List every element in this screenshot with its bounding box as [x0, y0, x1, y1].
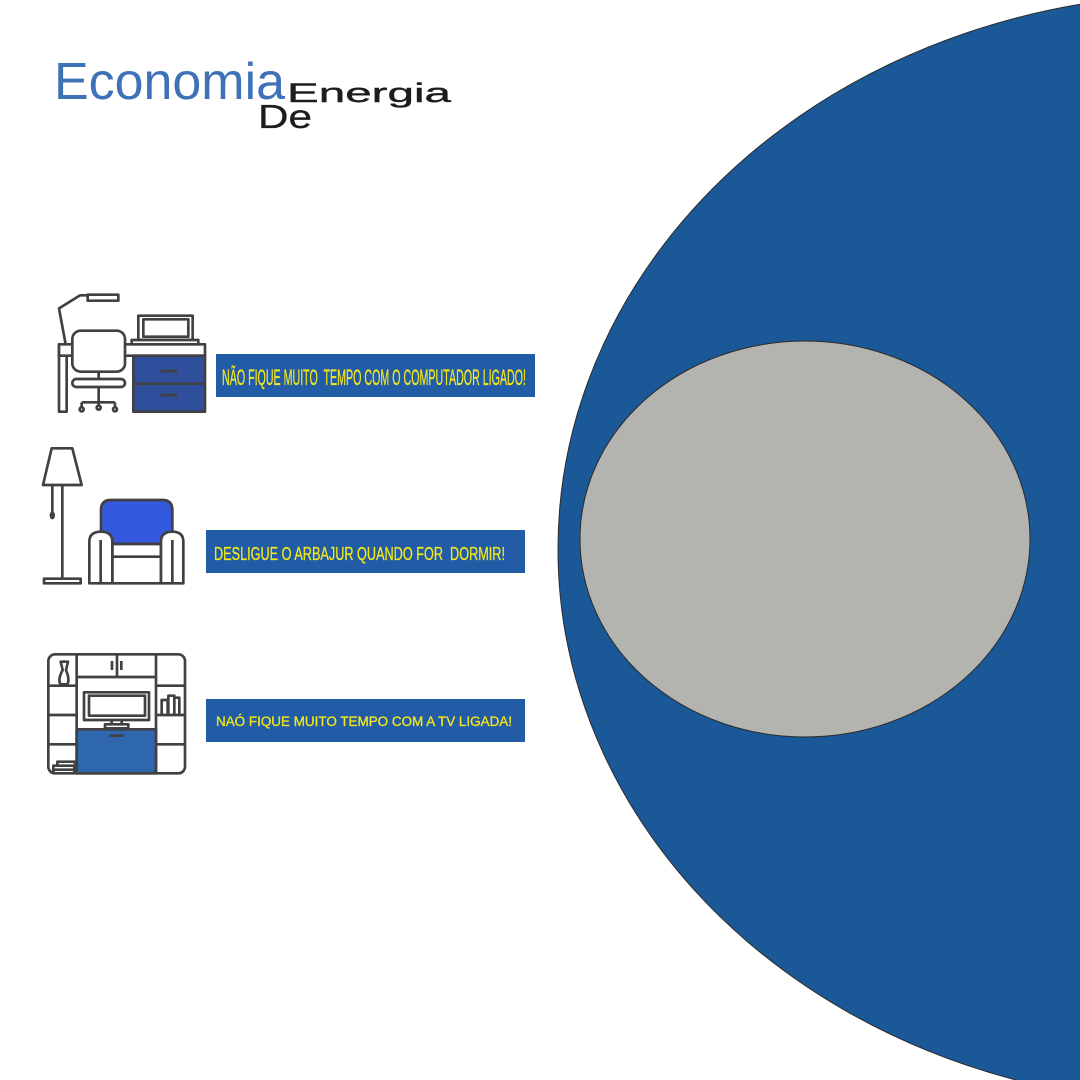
- icon: floor lamp and armchair: [43, 448, 183, 583]
- title word: De: De: [258, 98, 312, 135]
- title word: Energia: Energia: [287, 78, 453, 108]
- grey inner ellipse: [580, 341, 1030, 737]
- icon: desk with computer: [59, 295, 205, 412]
- large blue ellipse: [558, 0, 1080, 1080]
- tip bar: TV: [206, 699, 525, 742]
- tip text: TV: NAÓ FIQUE MUITO TEMPO COM A TV LIGADA!: [216, 714, 512, 729]
- tip bar: lamp: [206, 530, 525, 573]
- title word: Economia: Economia: [54, 53, 285, 111]
- title: [54, 53, 453, 135]
- icon: TV cabinet: [48, 654, 185, 773]
- tip text: lamp: DESLIGUE O ARBAJUR QUANDO FOR DORMIR!: [214, 544, 505, 564]
- tip bar: computer: [216, 354, 535, 397]
- infographic canvas: NÃO FIQUE MUITO TEMPO COM O COMPUTADOR LIGADO!: [222, 365, 526, 390]
